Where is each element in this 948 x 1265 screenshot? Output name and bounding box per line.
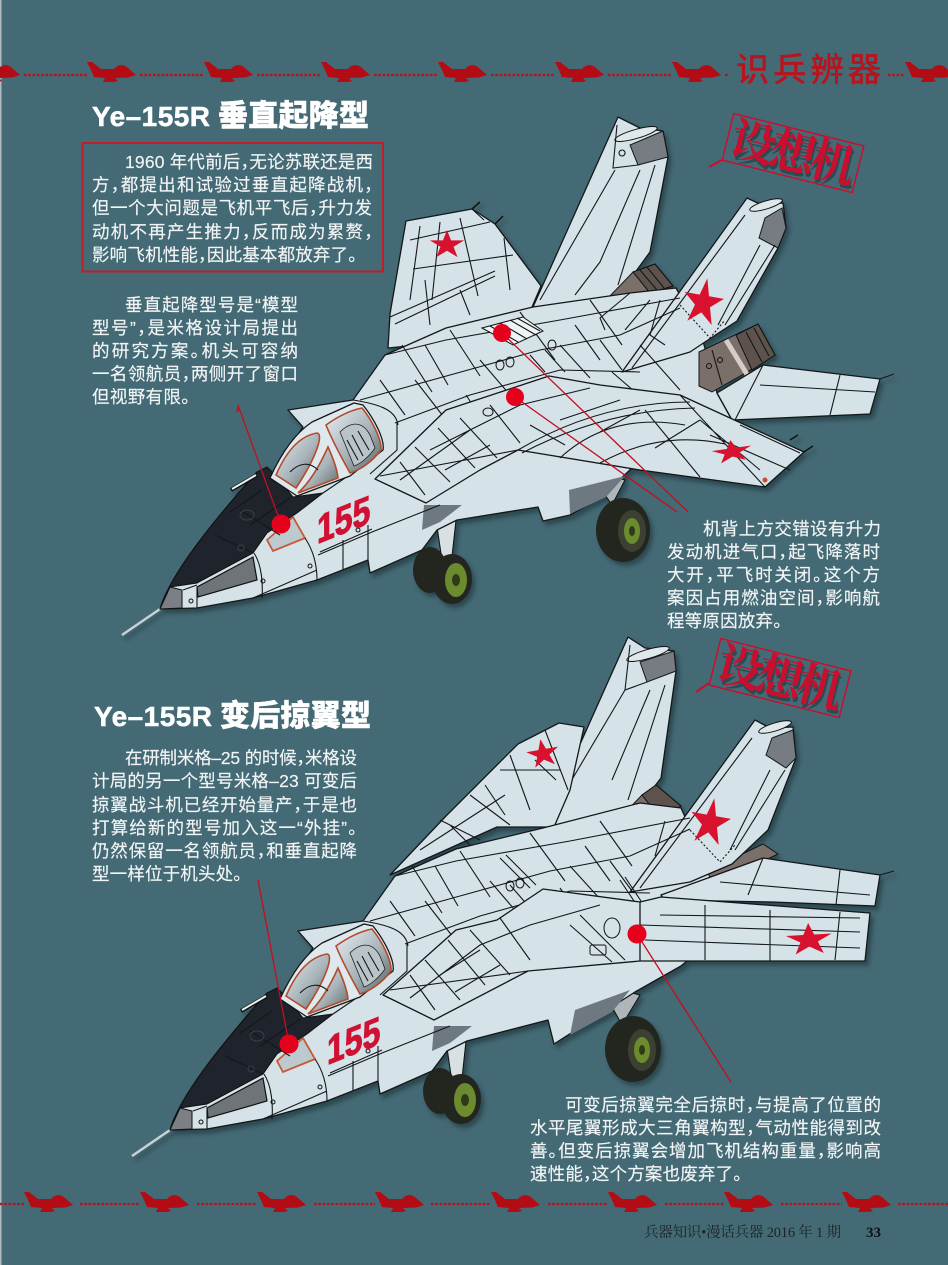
- callout lines: vertical lift: [236, 324, 688, 534]
- upper panel lines: [360, 293, 680, 435]
- swept main wing: [640, 897, 870, 961]
- text: swing wing conclusion: 可变后掠翼完全后掠时，与提高了位置的: [565, 1095, 881, 1115]
- intro box: 影响飞机性能，因此基本都放弃了。: [92, 245, 357, 265]
- stamp 2: 设想机: [711, 628, 851, 723]
- heading 1: Ye–155R: [92, 101, 210, 132]
- belly shadow: [432, 990, 630, 1051]
- number 155: 155: [317, 486, 370, 553]
- number 155: 155: [327, 1007, 380, 1074]
- text: swing wing conclusion: 水平尾翼形成大三角翼构型，气动性能得到改: [530, 1118, 881, 1138]
- text: swing wing background: [92, 748, 357, 884]
- section label: 识兵辨器: [736, 43, 881, 91]
- near tailplane: [717, 365, 894, 420]
- fuselage: [170, 803, 725, 1130]
- text: swing wing conclusion: [530, 1095, 881, 1184]
- far vertical fin: [533, 117, 668, 307]
- aircraft: vertical lift variant: [122, 117, 894, 635]
- text: model designation: 一名领航员，两侧开了窗口: [92, 364, 298, 384]
- near nozzle: [707, 844, 778, 882]
- stamp 2: 设想机: [712, 631, 852, 726]
- heading 1: 垂直起降型: [218, 91, 369, 135]
- text: dorsal intakes: 机背上方交错设有升力: [703, 519, 881, 539]
- footer text: 33: [866, 1225, 881, 1241]
- far vertical fin: [543, 637, 676, 827]
- intro box: 1960 年代前后，无论苏联还是西: [125, 152, 373, 172]
- near glove: [383, 889, 661, 1020]
- probe: [132, 1130, 170, 1156]
- text: swing wing background: 计局的另一个型号米格–23 可变后: [92, 771, 357, 791]
- nose gear wheels: [413, 520, 472, 604]
- footer text: 兵器知识•漫话兵器 2016 年 1 期: [644, 1223, 841, 1241]
- text: swing wing conclusion: 善。但变后掠翼会增加飞机结构重量，影响高: [530, 1141, 881, 1161]
- text: swing wing conclusion: 速性能，这个方案也废弃了。: [530, 1164, 742, 1184]
- nose and canopy: [170, 921, 450, 1130]
- heading 2: 变后掠翼型: [220, 691, 371, 735]
- heading 2: [94, 691, 371, 735]
- intro box: 动机不再产生推力，反而成为累赘，: [92, 222, 373, 242]
- far wing: [388, 202, 541, 348]
- text: swing wing background: 掠翼战斗机已经开始量产，于是也: [92, 795, 357, 815]
- stamp 1: 设想机: [724, 103, 864, 198]
- text: model designation: 的研究方案。机头可容纳: [92, 341, 298, 361]
- probe: [122, 609, 160, 635]
- near wing: [375, 376, 813, 503]
- belly shadow: [422, 476, 625, 530]
- far nozzle: [610, 264, 673, 296]
- text: dorsal intakes: 程等原因放弃。: [667, 611, 782, 631]
- near vertical fin: [630, 718, 796, 892]
- intro box: 方，都提出和试验过垂直起降战机，: [92, 175, 373, 195]
- intro box: [82, 143, 383, 272]
- text: model designation: 垂直起降型号是“模型: [125, 295, 298, 315]
- text: model designation: [92, 295, 298, 407]
- upper panel lines: [370, 818, 690, 946]
- near vertical fin: [622, 196, 786, 372]
- far swept wing: [390, 723, 584, 875]
- text: dorsal intakes: 发动机进气口，起飞降落时: [667, 542, 880, 562]
- far nozzle: [620, 785, 681, 822]
- text: dorsal intakes: 大开，平飞时关闭。这个方: [667, 565, 880, 585]
- fuselage: [160, 288, 732, 609]
- text: dorsal intakes: 案因占用燃油空间，影响航: [667, 588, 880, 608]
- header decorative plane row: [0, 62, 948, 82]
- port dorsal intake: [482, 317, 543, 345]
- text: dorsal intakes: [667, 519, 881, 631]
- intro box: 但一个大问题是飞机平飞后，升力发: [92, 198, 372, 218]
- main gear wheel: [600, 985, 661, 1082]
- text: swing wing background: 型一样位于机头处。: [92, 864, 242, 884]
- nose gear wheels: [423, 1041, 481, 1124]
- nose and canopy: [160, 400, 440, 609]
- heading 2: Ye–155R: [94, 701, 212, 732]
- footer decorative plane row: [0, 1192, 948, 1212]
- text: swing wing background: 打算给新的型号加入这一“外挂”。: [92, 818, 357, 838]
- stamp 1: 设想机: [725, 106, 865, 201]
- heading 1: [92, 91, 369, 135]
- text: model designation: 型号”，是米格设计局提出: [92, 318, 298, 338]
- text: swing wing background: 在研制米格–25 的时候，米格设: [125, 748, 357, 768]
- near tailplane: [661, 858, 894, 906]
- main gear wheel: [588, 470, 650, 562]
- callout lines: swing wing: [258, 880, 731, 1082]
- left page edge: [0, 0, 2, 1265]
- starboard dorsal intake: [503, 379, 559, 412]
- text: model designation: 但视野有限。: [92, 387, 190, 407]
- aircraft: swing wing variant: [132, 637, 894, 1156]
- text: swing wing background: 仍然保留一名领航员，和垂直起降: [92, 841, 357, 861]
- near nozzle: [699, 324, 775, 392]
